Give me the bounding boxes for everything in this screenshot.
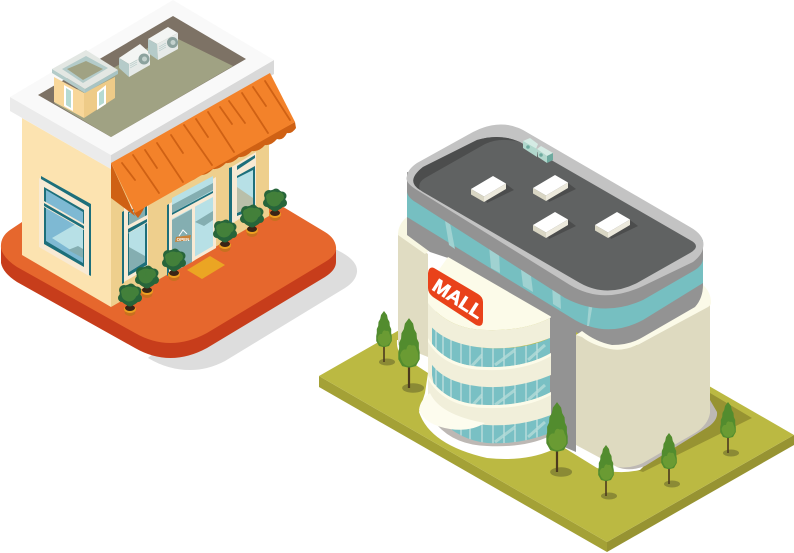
shop: roof slab bbox=[10, 0, 274, 169]
mall: roof rim lower edge bbox=[407, 172, 703, 309]
mall: rotunda bbox=[419, 257, 551, 446]
shop: left wall window bbox=[39, 176, 91, 276]
mall: rotunda wall bbox=[428, 300, 436, 410]
shop: glass door bbox=[167, 176, 216, 276]
shop: potted plants bbox=[118, 188, 287, 316]
shop: air conditioner units bbox=[119, 27, 178, 77]
shop: shadow bbox=[148, 225, 357, 370]
mall: right block bbox=[576, 285, 711, 468]
mall: rooftop vents bbox=[471, 175, 638, 239]
shop: storefront window right bbox=[229, 152, 256, 225]
mall: roof rim bbox=[406, 124, 703, 295]
mall: grass base bbox=[319, 269, 794, 552]
mall: gray core bbox=[407, 215, 703, 452]
mall: teal glass band bbox=[407, 180, 703, 329]
mall: trees bbox=[376, 311, 739, 500]
shop: platform bbox=[1, 205, 336, 358]
shop: building walls bbox=[22, 76, 269, 307]
mall: rooftop air conditioners bbox=[523, 138, 553, 163]
shop: orange awning bbox=[111, 73, 296, 218]
mall: red MALL sign: MALL bbox=[428, 276, 487, 324]
mall: glass bands bbox=[432, 328, 550, 444]
door sign: open: OPEN bbox=[177, 237, 189, 242]
shop: doormat bbox=[187, 256, 225, 279]
mall: roof deck bbox=[413, 137, 696, 290]
mall: white walkway bbox=[397, 340, 650, 472]
mall: lower ring bbox=[428, 375, 551, 425]
mall: ground shadow bbox=[437, 400, 717, 469]
shop: roof hut bbox=[52, 50, 118, 118]
mall: entrance canopy bbox=[419, 393, 485, 430]
shop: storefront window left bbox=[122, 194, 148, 284]
mall: middle ring bbox=[428, 338, 551, 387]
mall: top ring and cap bbox=[428, 257, 551, 348]
mall: back left block bbox=[398, 217, 430, 357]
